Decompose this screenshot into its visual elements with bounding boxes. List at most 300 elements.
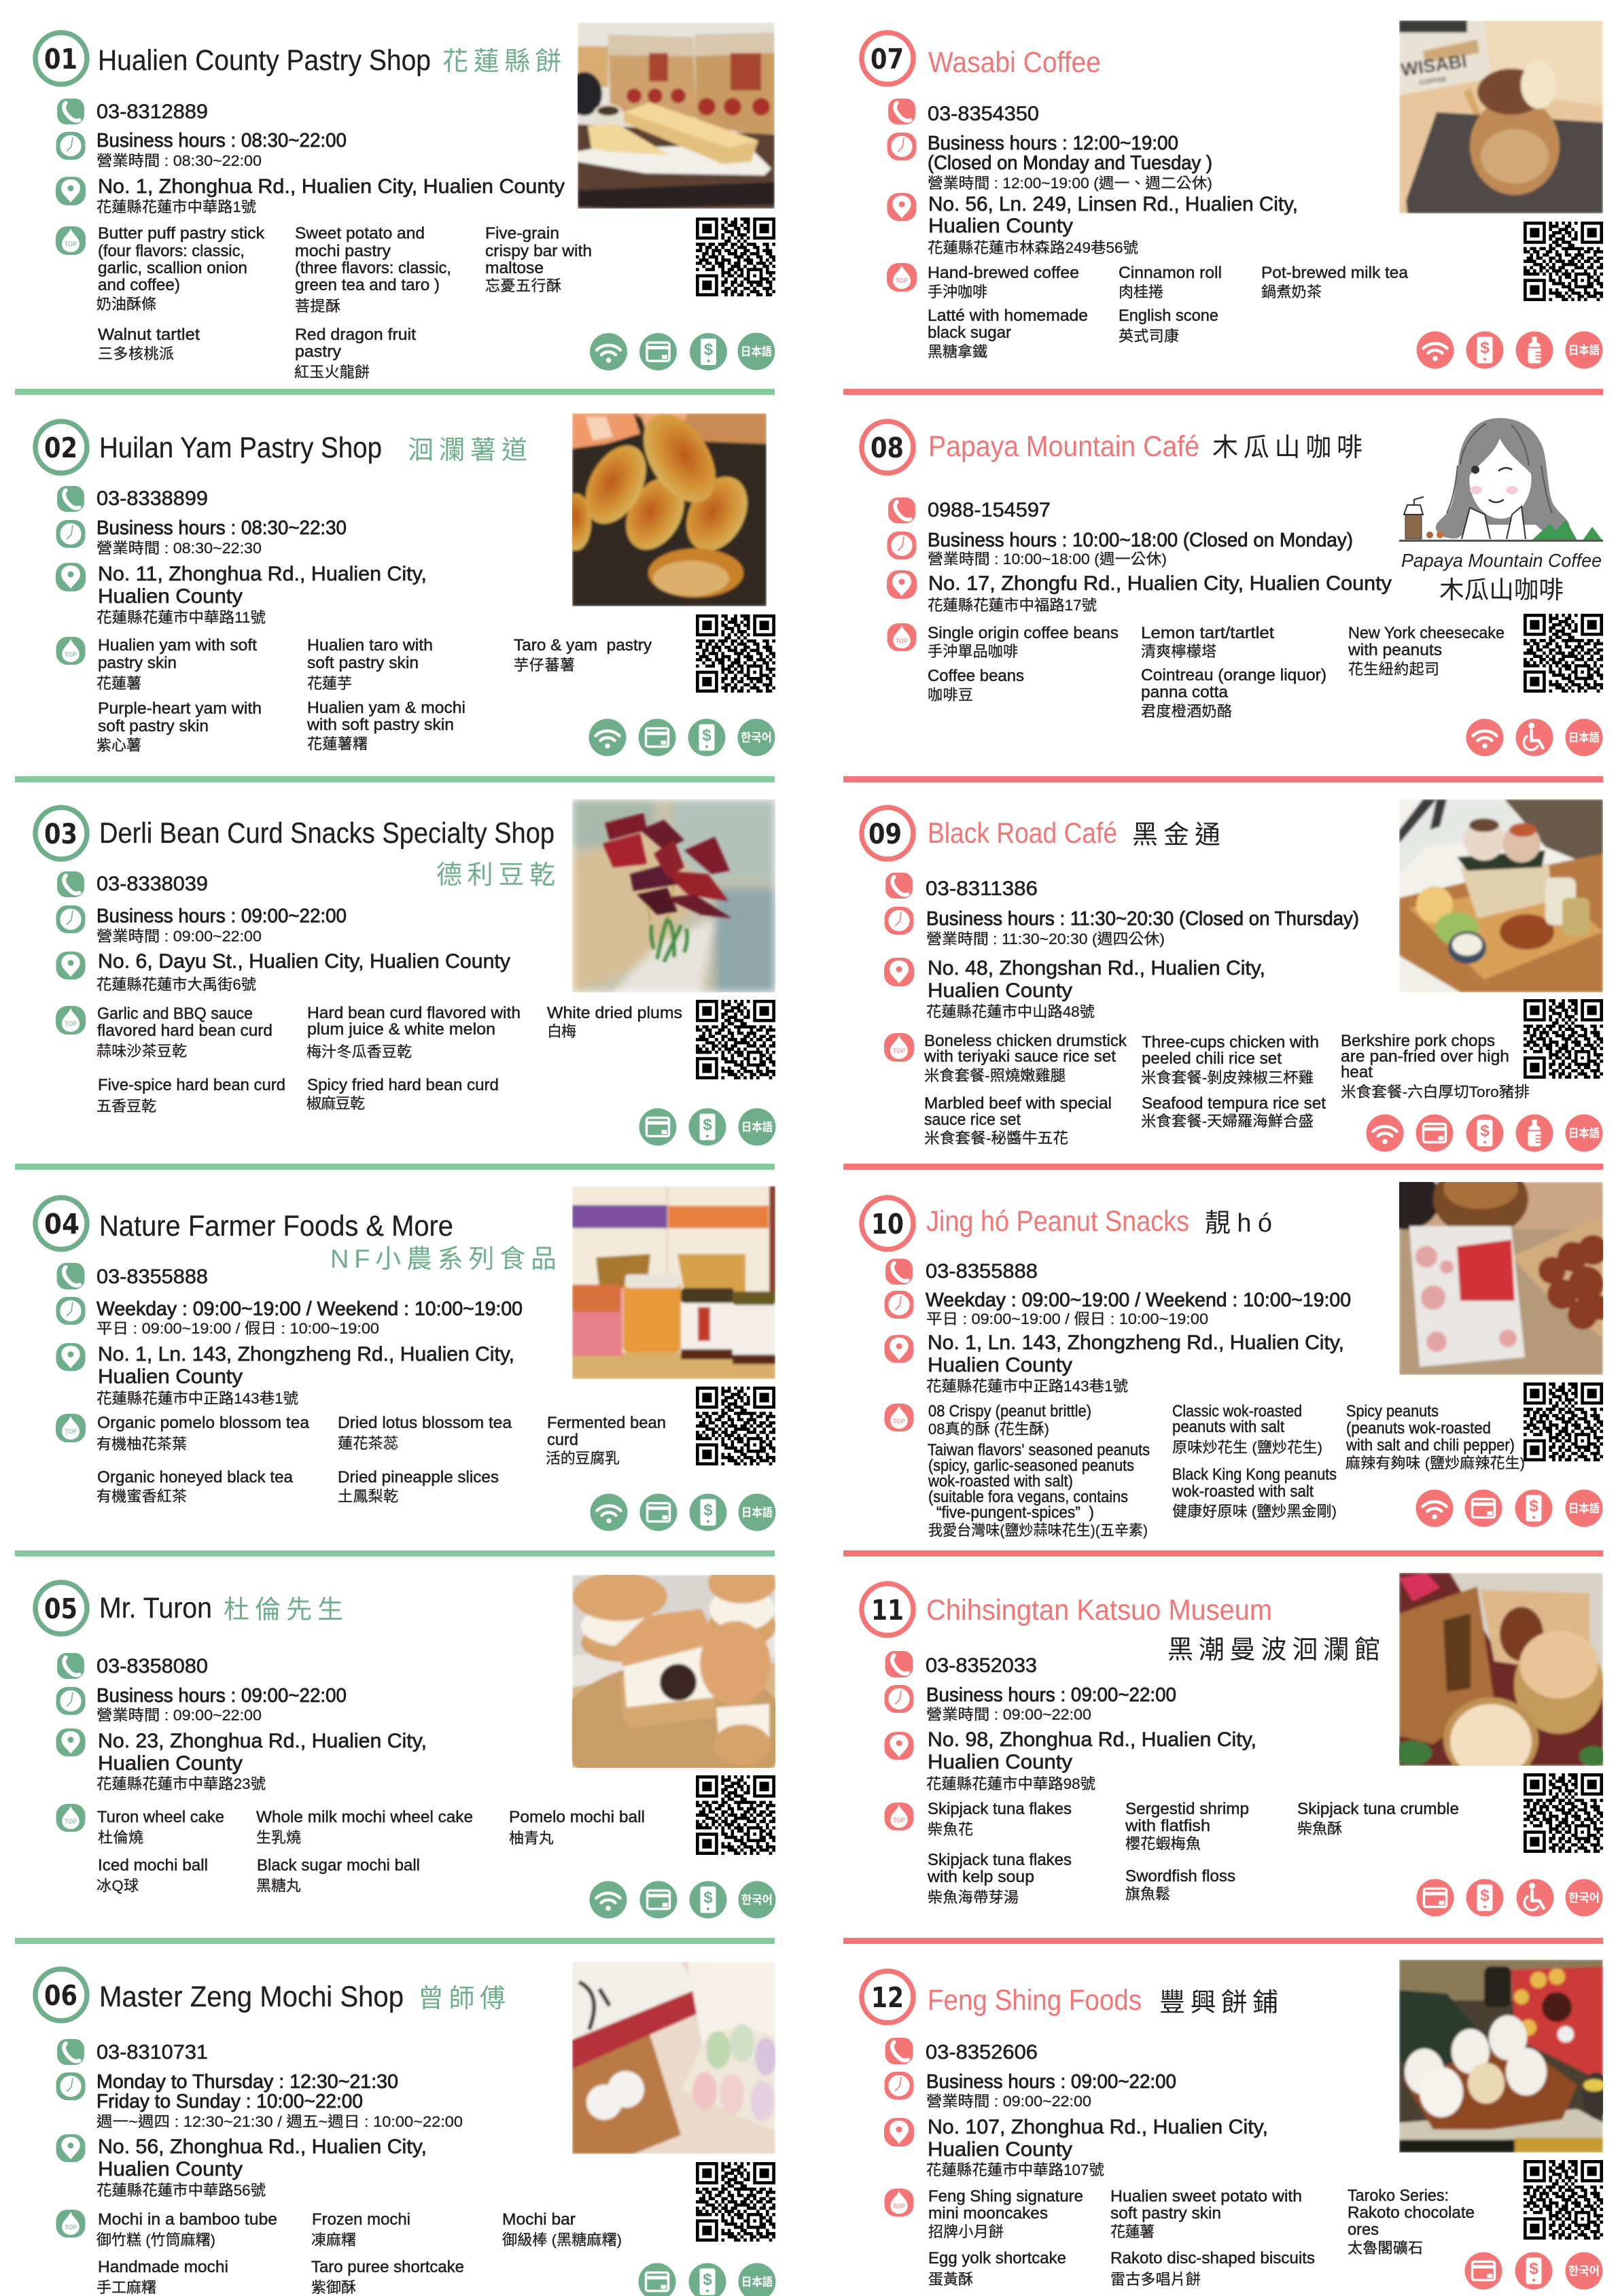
address row: No. 107, Zhonghua Rd., Hualien City, [928, 2116, 1268, 2138]
address row: No. 17, Zhongfu Rd., Hualien City, Hualien County [928, 572, 1392, 595]
menu items: 花蓮薯 [1110, 2223, 1155, 2240]
shop name: 杜倫先生 [224, 1596, 343, 1624]
menu items: Butter puff pastry stick [98, 224, 265, 243]
QR code [696, 1000, 775, 1079]
QR code [696, 2162, 775, 2242]
menu items: TOP [65, 1428, 77, 1435]
menu items: 手工麻糬 [96, 2279, 156, 2296]
menu items: 咖啡豆 [928, 686, 973, 703]
hours row: 營業時間 : 09:00~22:00 [926, 2093, 1091, 2110]
service icons: 日本語 [1568, 1501, 1600, 1515]
menu items: Spicy fried hard bean curd [307, 1076, 499, 1094]
menu items: peeled chili rice set [1142, 1049, 1282, 1068]
shop name: Huilan Yam Pastry Shop [99, 432, 382, 464]
menu items: 招牌小月餅 [928, 2223, 1004, 2240]
hours row: 平日 : 09:00~19:00 / 假日 : 10:00~19:00 [926, 1310, 1208, 1327]
phone row [888, 99, 1039, 125]
menu items: 芋仔蕃薯 [514, 657, 575, 674]
menu items: Hualien yam with soft [98, 636, 257, 655]
menu items: Hualien taro with [307, 636, 433, 655]
hours row: Business hours : 08:30~22:00 [96, 130, 347, 152]
menu items: 黑糖拿鐵 [928, 343, 987, 360]
address row: Hualien County [928, 979, 1072, 1002]
menu items: 御級棒 (黑糖麻糬) [502, 2231, 622, 2248]
number badge 01 [35, 33, 87, 84]
hours row: Monday to Thursday : 12:30~21:30 [96, 2071, 398, 2093]
menu items: 櫻花蝦梅魚 [1125, 1835, 1201, 1852]
photo: peanut snack packet [1399, 1182, 1603, 1375]
address row: Hualien County [98, 1752, 243, 1775]
hours row [887, 529, 1353, 568]
menu items: White dried plums [547, 1004, 682, 1022]
menu items: Latté with homemade [928, 307, 1088, 325]
photo: cream-filled turon cakes [572, 1575, 775, 1768]
menu items: Coffee beans [928, 667, 1024, 685]
menu items: 柴魚花 [928, 1821, 973, 1838]
menu items: Turon wheel cake [97, 1808, 224, 1826]
menu items: Hualien yam & mochi [307, 699, 465, 717]
hours row: Friday to Sunday : 10:00~22:00 [96, 2091, 363, 2112]
number badge 03: 03 [44, 818, 77, 850]
phone row: 03-8338899 [96, 487, 208, 510]
menu items: crispy bar with [485, 242, 592, 260]
menu items: Marbled beef with special [924, 1094, 1112, 1113]
shop name: Hualien County Pastry Shop [98, 44, 431, 77]
menu items: Hualien sweet potato with [1110, 2187, 1302, 2206]
service icons [590, 1494, 776, 1531]
service icons [588, 719, 775, 756]
number badge 09: 09 [868, 818, 902, 850]
menu items: with peanuts [1348, 641, 1442, 659]
phone row [57, 1263, 208, 1289]
photo: katsuo flakes and packaging [1399, 1573, 1603, 1766]
menu items: heat [1341, 1063, 1373, 1081]
menu items: Pot-brewed milk tea [1261, 264, 1409, 282]
menu items: Spicy peanuts [1346, 1402, 1439, 1421]
menu items: Rakoto disc-shaped biscuits [1110, 2249, 1315, 2267]
menu items: TOP [65, 1020, 77, 1027]
menu items: 菩提酥 [295, 298, 340, 315]
phone row: 03-8358080 [96, 1655, 208, 1677]
menu items: 原味炒花生 (鹽炒花生) [1172, 1439, 1322, 1456]
menu items: 土鳳梨乾 [338, 1488, 398, 1505]
QR code [696, 1387, 775, 1465]
menu items: wok-roasted with salt [1172, 1482, 1314, 1501]
hours row [885, 1684, 1176, 1723]
menu items: with salt and chili pepper) [1346, 1436, 1515, 1455]
hours row: 營業時間 : 10:00~18:00 (週一公休) [928, 551, 1167, 568]
menu items: Mochi bar [502, 2210, 576, 2229]
service icons: 한국어 [741, 731, 772, 744]
menu items [56, 2210, 622, 2296]
photo: cinnamon roll: COFFEE [1419, 75, 1447, 87]
menu items: 清爽檸檬塔 [1141, 643, 1216, 660]
menu items: Fermented bean [547, 1414, 666, 1432]
menu items: curd [547, 1431, 578, 1449]
number badge 06 [35, 1969, 87, 2021]
shop name: 豐興餅鋪 [1159, 1989, 1278, 2017]
menu items: Pomelo mochi ball [509, 1808, 645, 1826]
illustration: girl with coffee grinder and logo: 木瓜山咖啡 [1439, 576, 1564, 604]
address row: Hualien County [98, 585, 243, 608]
menu items: 椒麻豆乾 [306, 1095, 365, 1112]
number badge 09 [862, 807, 913, 859]
panel: shop 02 Huilan Yam Pastry Shop [15, 401, 775, 782]
photo: cinnamon roll [1399, 20, 1603, 213]
menu items: TOP [65, 2224, 77, 2231]
QR code [1524, 222, 1603, 301]
menu items: 旗魚鬆 [1125, 1885, 1170, 1902]
menu items: ores [1348, 2221, 1379, 2239]
menu items [56, 1414, 666, 1505]
QR code [1524, 999, 1603, 1079]
address row [887, 193, 1298, 256]
panel: shop 11 Chihsingtan Katsuo Museum [843, 1573, 1606, 1944]
menu items: and coffee) [98, 276, 180, 294]
menu items: Swordfish floss [1125, 1867, 1235, 1885]
hours row [56, 1297, 523, 1337]
number badge 04 [35, 1198, 87, 1249]
hours row: Business hours : 09:00~22:00 [926, 2071, 1176, 2093]
panel: shop 08 Papaya Mountain Cafe [843, 418, 1603, 782]
menu items: 手沖單品咖啡 [928, 643, 1018, 660]
address row: Hualien County [98, 1366, 243, 1388]
hours row: Business hours : 09:00~22:00 [926, 1684, 1176, 1706]
menu items: Skipjack tuna flakes [928, 1851, 1072, 1869]
QR code [1524, 1382, 1603, 1461]
hours row: 營業時間 : 11:30~20:30 (週四公休) [926, 930, 1165, 947]
menu items: Black King Kong peanuts [1172, 1465, 1337, 1484]
menu items: 花蓮芋 [307, 675, 352, 692]
menu items: mochi pastry [295, 242, 391, 260]
service icons: 한국어 [741, 1894, 773, 1907]
service icons: 日本語 [741, 1506, 773, 1519]
menu items: 紫御酥 [311, 2279, 356, 2296]
QR code [696, 614, 775, 693]
address row [887, 570, 1392, 614]
menu items: 麻辣有夠味 (鹽炒麻辣花生) [1346, 1455, 1525, 1472]
menu items: Berkshire pork chops [1341, 1032, 1495, 1050]
hours row: Business hours : 09:00~22:00 [96, 1685, 347, 1707]
phone row [57, 99, 208, 124]
address row [885, 1332, 1344, 1395]
menu items: green tea and taro ) [295, 276, 440, 294]
menu items: 有機柚花茶葉 [96, 1436, 187, 1453]
shop name: 德利豆乾 [436, 861, 555, 890]
menu items: 忘憂五行酥 [485, 277, 561, 294]
number badge 05: 05 [44, 1593, 77, 1625]
menu items: 蓮花茶蕊 [338, 1435, 398, 1452]
menu items: 健康好原味 (鹽炒黑金剛) [1172, 1503, 1337, 1520]
phone row: 03-8338039 [96, 873, 208, 895]
menu items: 手沖咖啡 [928, 283, 987, 300]
menu items [56, 636, 652, 754]
phone row [885, 1259, 1038, 1285]
menu items: with kelp soup [927, 1868, 1034, 1886]
QR code [1524, 2160, 1603, 2240]
phone row: 03-8312889 [96, 101, 208, 123]
service icons [1416, 1490, 1602, 1527]
number badge 04: 04 [44, 1208, 80, 1240]
menu items: Skipjack tuna crumble [1297, 1800, 1459, 1818]
menu items: Egg yolk shortcake [928, 2249, 1066, 2267]
number badge 08 [862, 421, 913, 473]
menu items: Organic honeyed black tea [97, 1468, 294, 1486]
panel: shop 07 Wasabi Coffee [843, 20, 1603, 395]
panel: shop 10 Jing ho Peanut Snacks [843, 1162, 1612, 1556]
photo: packaged teas and jars [572, 1186, 775, 1379]
menu items: 肉桂捲 [1119, 283, 1163, 300]
phone row [57, 2039, 208, 2065]
menu items: (peanuts wok-roasted [1346, 1419, 1491, 1438]
panel: shop 09 Black Road Cafe [843, 799, 1603, 1170]
menu items: Taro puree shortcake [311, 2258, 464, 2276]
illustration: girl with coffee grinder and logo: Papaya Mountain Coffee [1401, 550, 1602, 571]
shop name: Master Zeng Mochi Shop [99, 1981, 404, 2013]
menu items: TOP [893, 1817, 905, 1824]
QR code [1524, 1773, 1603, 1853]
number badge 01: 01 [44, 43, 77, 75]
QR code [696, 1775, 775, 1855]
menu items [887, 263, 1409, 360]
hours row [56, 517, 347, 557]
photo: butter pastry sticks [578, 22, 775, 209]
address row: 花蓮縣花蓮市大禹街6號 [96, 976, 256, 993]
address row: No. 1, Ln. 143, Zhongzheng Rd., Hualien City, [928, 1332, 1344, 1354]
menu items [885, 1800, 1459, 1906]
address row [56, 950, 510, 993]
menu items: 花生紐約起司 [1348, 661, 1439, 678]
panel: shop 05 Mr. Turon [15, 1563, 790, 1944]
menu items [885, 2187, 1475, 2288]
address row: 花蓮縣花蓮市中正路143巷1號 [96, 1390, 298, 1407]
menu items: (three flavors: classic, [295, 259, 451, 277]
menu items: peanuts with salt [1172, 1418, 1284, 1436]
menu items: Garlic and BBQ sauce [97, 1005, 253, 1023]
hours row [885, 1289, 1351, 1327]
menu items: garlic, scallion onion [98, 259, 247, 277]
number badge 12 [862, 1971, 913, 2023]
menu items: 柚青丸 [509, 1830, 554, 1847]
hours row: 營業時間 : 12:00~19:00 (週一、週二公休) [928, 175, 1212, 192]
menu items: 柴魚海帶芽湯 [928, 1889, 1019, 1906]
service icons [1465, 2252, 1602, 2289]
menu items: 凍麻糬 [311, 2231, 356, 2248]
menu items: 米食套餐-剝皮辣椒三杯雞 [1141, 1069, 1314, 1086]
menu items: flavored hard bean curd [97, 1022, 272, 1040]
shop name: 木瓜山咖啡 [1212, 434, 1362, 462]
shop name: Chihsingtan Katsuo Museum [926, 1594, 1272, 1627]
address row: No. 48, Zhongshan Rd., Hualien City, [928, 957, 1265, 979]
menu items: with teriyaki sauce rice set [924, 1047, 1116, 1066]
menu items [885, 1402, 1525, 1539]
photo: mooncakes on wooden board [1399, 1960, 1603, 2153]
phone row: 03-8355888 [96, 1266, 208, 1288]
menu items: Taroko Series: [1348, 2187, 1449, 2205]
shop name: 花蓮縣餅 [442, 48, 561, 76]
photo: rice set meal on wooden tray [1399, 799, 1603, 992]
menu items: are pan-fried over high [1341, 1047, 1509, 1066]
service icons [590, 1881, 776, 1918]
shop name: 洄瀾薯道 [408, 436, 527, 465]
menu items: mini mooncakes [928, 2204, 1048, 2223]
shop name: Derli Bean Curd Snacks Specialty Shop [99, 817, 555, 850]
phone row [885, 2038, 1038, 2064]
menu items: Iced mochi ball [98, 1856, 208, 1875]
address row: 花蓮縣花蓮市中華路23號 [96, 1775, 266, 1792]
address row [56, 175, 565, 215]
menu items: Walnut tartlet [98, 326, 200, 344]
menu items: Five-spice hard bean curd [98, 1076, 285, 1094]
address row [884, 2116, 1268, 2178]
shop name: 黑金通 [1132, 821, 1220, 850]
menu items: 蛋黃酥 [928, 2271, 973, 2288]
menu items: TOP [893, 2203, 905, 2210]
shop name: Jing hó Peanut Snacks [926, 1205, 1189, 1238]
menu items: 奶油酥條 [96, 296, 156, 313]
illustration: girl with coffee grinder and logo [1399, 418, 1603, 604]
menu items: Sweet potato and [295, 224, 425, 243]
menu items: Hard bean curd flavored with [307, 1004, 521, 1022]
menu items: pastry [295, 343, 341, 361]
menu items: (spicy, garlic-seasoned peanuts [928, 1457, 1134, 1475]
address row [56, 1728, 427, 1792]
phone row: 03-8310731 [96, 2041, 208, 2064]
hours row [56, 130, 347, 169]
menu items: 花蓮薯糬 [307, 735, 368, 752]
address row: 花蓮縣花蓮市中華路107號 [926, 2161, 1104, 2178]
QR code [696, 218, 775, 296]
address row: Hualien County [928, 215, 1073, 237]
menu items: 梅汁冬瓜香豆乾 [306, 1043, 412, 1060]
menu items: TOP [893, 1047, 905, 1054]
menu items: soft pastry skin [98, 717, 209, 735]
shop name [928, 1984, 1278, 2017]
hours row [56, 1685, 347, 1724]
panel: shop 06 Master Zeng Mochi Shop [35, 1962, 777, 2296]
address row: Hualien County [928, 1354, 1072, 1376]
phone row [888, 498, 1051, 523]
phone row: 03-8354350 [928, 103, 1039, 125]
address row: Hualien County [98, 2158, 243, 2180]
number badge 07: 07 [870, 43, 904, 75]
address row: No. 6, Dayu St., Hualien City, Hualien County [98, 950, 510, 973]
menu items: Black sugar mochi ball [257, 1856, 420, 1875]
panel: shop 01 Hualien County Pastry Shop [15, 22, 775, 395]
menu items: pastry skin [98, 654, 177, 672]
menu items: 米食套餐-照燒嫩雞腿 [924, 1067, 1066, 1084]
hours row: Business hours : 10:00~18:00 (Closed on Monday) [928, 529, 1353, 551]
menu items: soft pastry skin [307, 654, 419, 672]
hours row: Weekday : 09:00~19:00 / Weekend : 10:00~19:00 [926, 1289, 1351, 1311]
menu items: 紅玉火龍餅 [294, 364, 370, 381]
service icons: 日本語 [1568, 343, 1600, 357]
hours row: 營業時間 : 08:30~22:30 [96, 540, 262, 557]
phone row [885, 1651, 1037, 1677]
phone row: 0988-154597 [928, 499, 1051, 521]
menu items: TOP [65, 1818, 77, 1825]
address row: 花蓮縣花蓮市林森路249巷56號 [928, 239, 1138, 256]
number badge 10: 10 [871, 1208, 904, 1240]
hours row [885, 907, 1359, 947]
hours row: 營業時間 : 09:00~22:00 [96, 1707, 262, 1724]
service icons [1416, 1879, 1602, 1917]
menu items: Taiwan flavors' seasoned peanuts [928, 1441, 1150, 1459]
address row: 花蓮縣花蓮市中華路98號 [926, 1775, 1095, 1792]
service icons: 日本語 [741, 1120, 773, 1134]
menu items: Purple-heart yam with [98, 699, 262, 718]
hours row: 平日 : 09:00~19:00 / 假日 : 10:00~19:00 [96, 1320, 379, 1337]
menu items: (four flavors: classic, [98, 242, 245, 260]
menu items: with soft pastry skin [306, 716, 454, 734]
shop name [99, 1210, 557, 1274]
menu items: Skipjack tuna flakes [928, 1800, 1072, 1818]
menu items: 杜倫燒 [98, 1829, 143, 1846]
menu items: Three-cups chicken with [1142, 1033, 1319, 1051]
address row: 花蓮縣花蓮市中山路48號 [926, 1003, 1095, 1020]
photo: dried bean curd skewers [572, 799, 775, 992]
menu items: 君度橙酒奶酪 [1141, 703, 1232, 720]
number badge 05 [35, 1582, 87, 1634]
menu items: New York cheesecake [1348, 624, 1505, 642]
menu items: Hand-brewed coffee [928, 264, 1079, 282]
menu items: “five-pungent-spices” ) [936, 1503, 1094, 1522]
menu items: 紫心薯 [96, 737, 141, 754]
hours row [56, 905, 347, 945]
hours row: 營業時間 : 09:00~22:00 [96, 928, 262, 945]
number badge 06: 06 [44, 1979, 77, 2012]
menu items: (suitable fora vegans, contains [928, 1488, 1128, 1506]
menu items: 蒜味沙茶豆乾 [96, 1043, 187, 1060]
menu items: 黑糖丸 [256, 1877, 301, 1894]
service icons [1366, 1115, 1602, 1151]
menu items: panna cotta [1141, 683, 1229, 701]
menu items: TOP [65, 651, 77, 658]
shop name: Feng Shing Foods [928, 1984, 1142, 2017]
address row: No. 98, Zhonghua Rd., Hualien City, [928, 1728, 1256, 1751]
address row: Hualien County [928, 2138, 1072, 2161]
address row: 花蓮縣花蓮市中華路1號 [96, 198, 256, 215]
shop name: Wasabi Coffee [928, 46, 1101, 79]
menu items: Frozen mochi [312, 2210, 410, 2229]
hours row: Business hours : 09:00~22:00 [96, 905, 347, 927]
address row: No. 11, Zhonghua Rd., Hualien City, [98, 563, 427, 585]
phone row [57, 871, 208, 897]
menu items: 三多核桃派 [98, 345, 174, 362]
hours row: Business hours : 08:30~22:30 [96, 517, 347, 539]
address row: No. 56, Zhonghua Rd., Hualien City, [98, 2136, 427, 2158]
shop name: 曾師傅 [418, 1985, 506, 2013]
phone row [885, 873, 1038, 900]
number badge 02: 02 [44, 432, 77, 464]
photo: boxed mochi [572, 1962, 775, 2154]
address row: 花蓮縣花蓮市中正路143巷1號 [926, 1378, 1128, 1395]
menu items: 柴魚酥 [1297, 1820, 1342, 1837]
menu items: 活的豆腐乳 [546, 1450, 620, 1467]
menu items [887, 623, 1505, 720]
shop name: 靚hó [1205, 1209, 1272, 1238]
shop name: Mr. Turon [99, 1592, 212, 1624]
service icons: 日本語 [1568, 1126, 1600, 1140]
menu items: Cointreau (orange liquor) [1141, 666, 1326, 684]
menu items: maltose [485, 259, 544, 277]
hours row: (Closed on Monday and Tuesday ) [928, 152, 1212, 174]
number badge 03 [35, 807, 87, 859]
panel: shop 04 Nature Farmer Foods and More [15, 1186, 776, 1556]
menu items: Lemon tart/tartlet [1141, 624, 1274, 642]
number badge 12: 12 [871, 1981, 904, 2014]
menu items: Handmade mochi [98, 2258, 228, 2276]
